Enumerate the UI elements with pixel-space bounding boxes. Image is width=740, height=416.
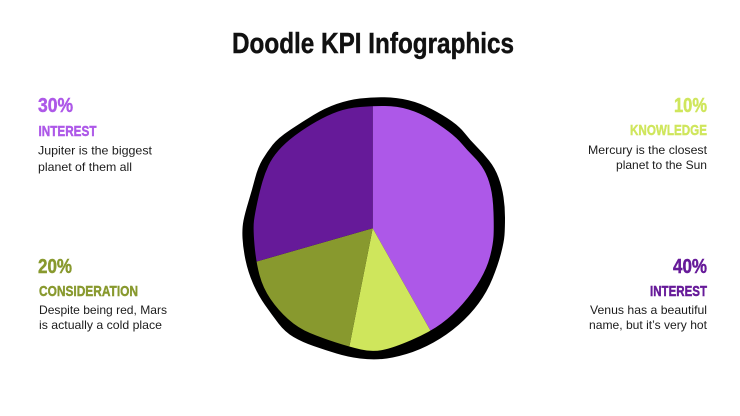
slice: 30% — [254, 106, 373, 262]
description — [588, 143, 708, 172]
label: INTEREST — [650, 283, 707, 300]
label: KNOWLEDGE — [630, 122, 707, 139]
title: Doodle KPI Infographics — [232, 28, 514, 60]
slice: 40% — [372, 106, 494, 330]
doodle pie chart — [242, 97, 505, 360]
panel: 20% consideration — [38, 256, 167, 332]
percentage: 20% — [38, 256, 72, 278]
percentage: 40% — [673, 256, 707, 278]
label: CONSIDERATION — [39, 283, 138, 300]
description: planet of them all — [38, 160, 132, 174]
percentage: 30% — [38, 95, 73, 117]
description: is actually a cold place — [39, 318, 162, 332]
description: Mercury is the closest — [588, 143, 708, 157]
slice: 20% — [256, 228, 373, 346]
description: name, but it’s very hot — [589, 318, 708, 332]
panel: 10% knowledge — [588, 95, 708, 172]
description: Venus has a beautiful — [590, 303, 707, 317]
description — [39, 303, 167, 332]
label: INTEREST — [38, 123, 96, 140]
pie slices — [254, 106, 494, 351]
slice: 10% — [349, 228, 430, 351]
description: Jupiter is the biggest — [38, 144, 153, 158]
description: Despite being red, Mars — [39, 303, 167, 317]
hand-drawn black outline — [242, 97, 505, 359]
description — [38, 144, 153, 174]
description — [589, 303, 708, 332]
panel: 30% interest — [38, 95, 153, 174]
percentage: 10% — [674, 95, 707, 117]
panel: 40% interest — [589, 256, 708, 332]
description: planet to the Sun — [616, 158, 707, 172]
